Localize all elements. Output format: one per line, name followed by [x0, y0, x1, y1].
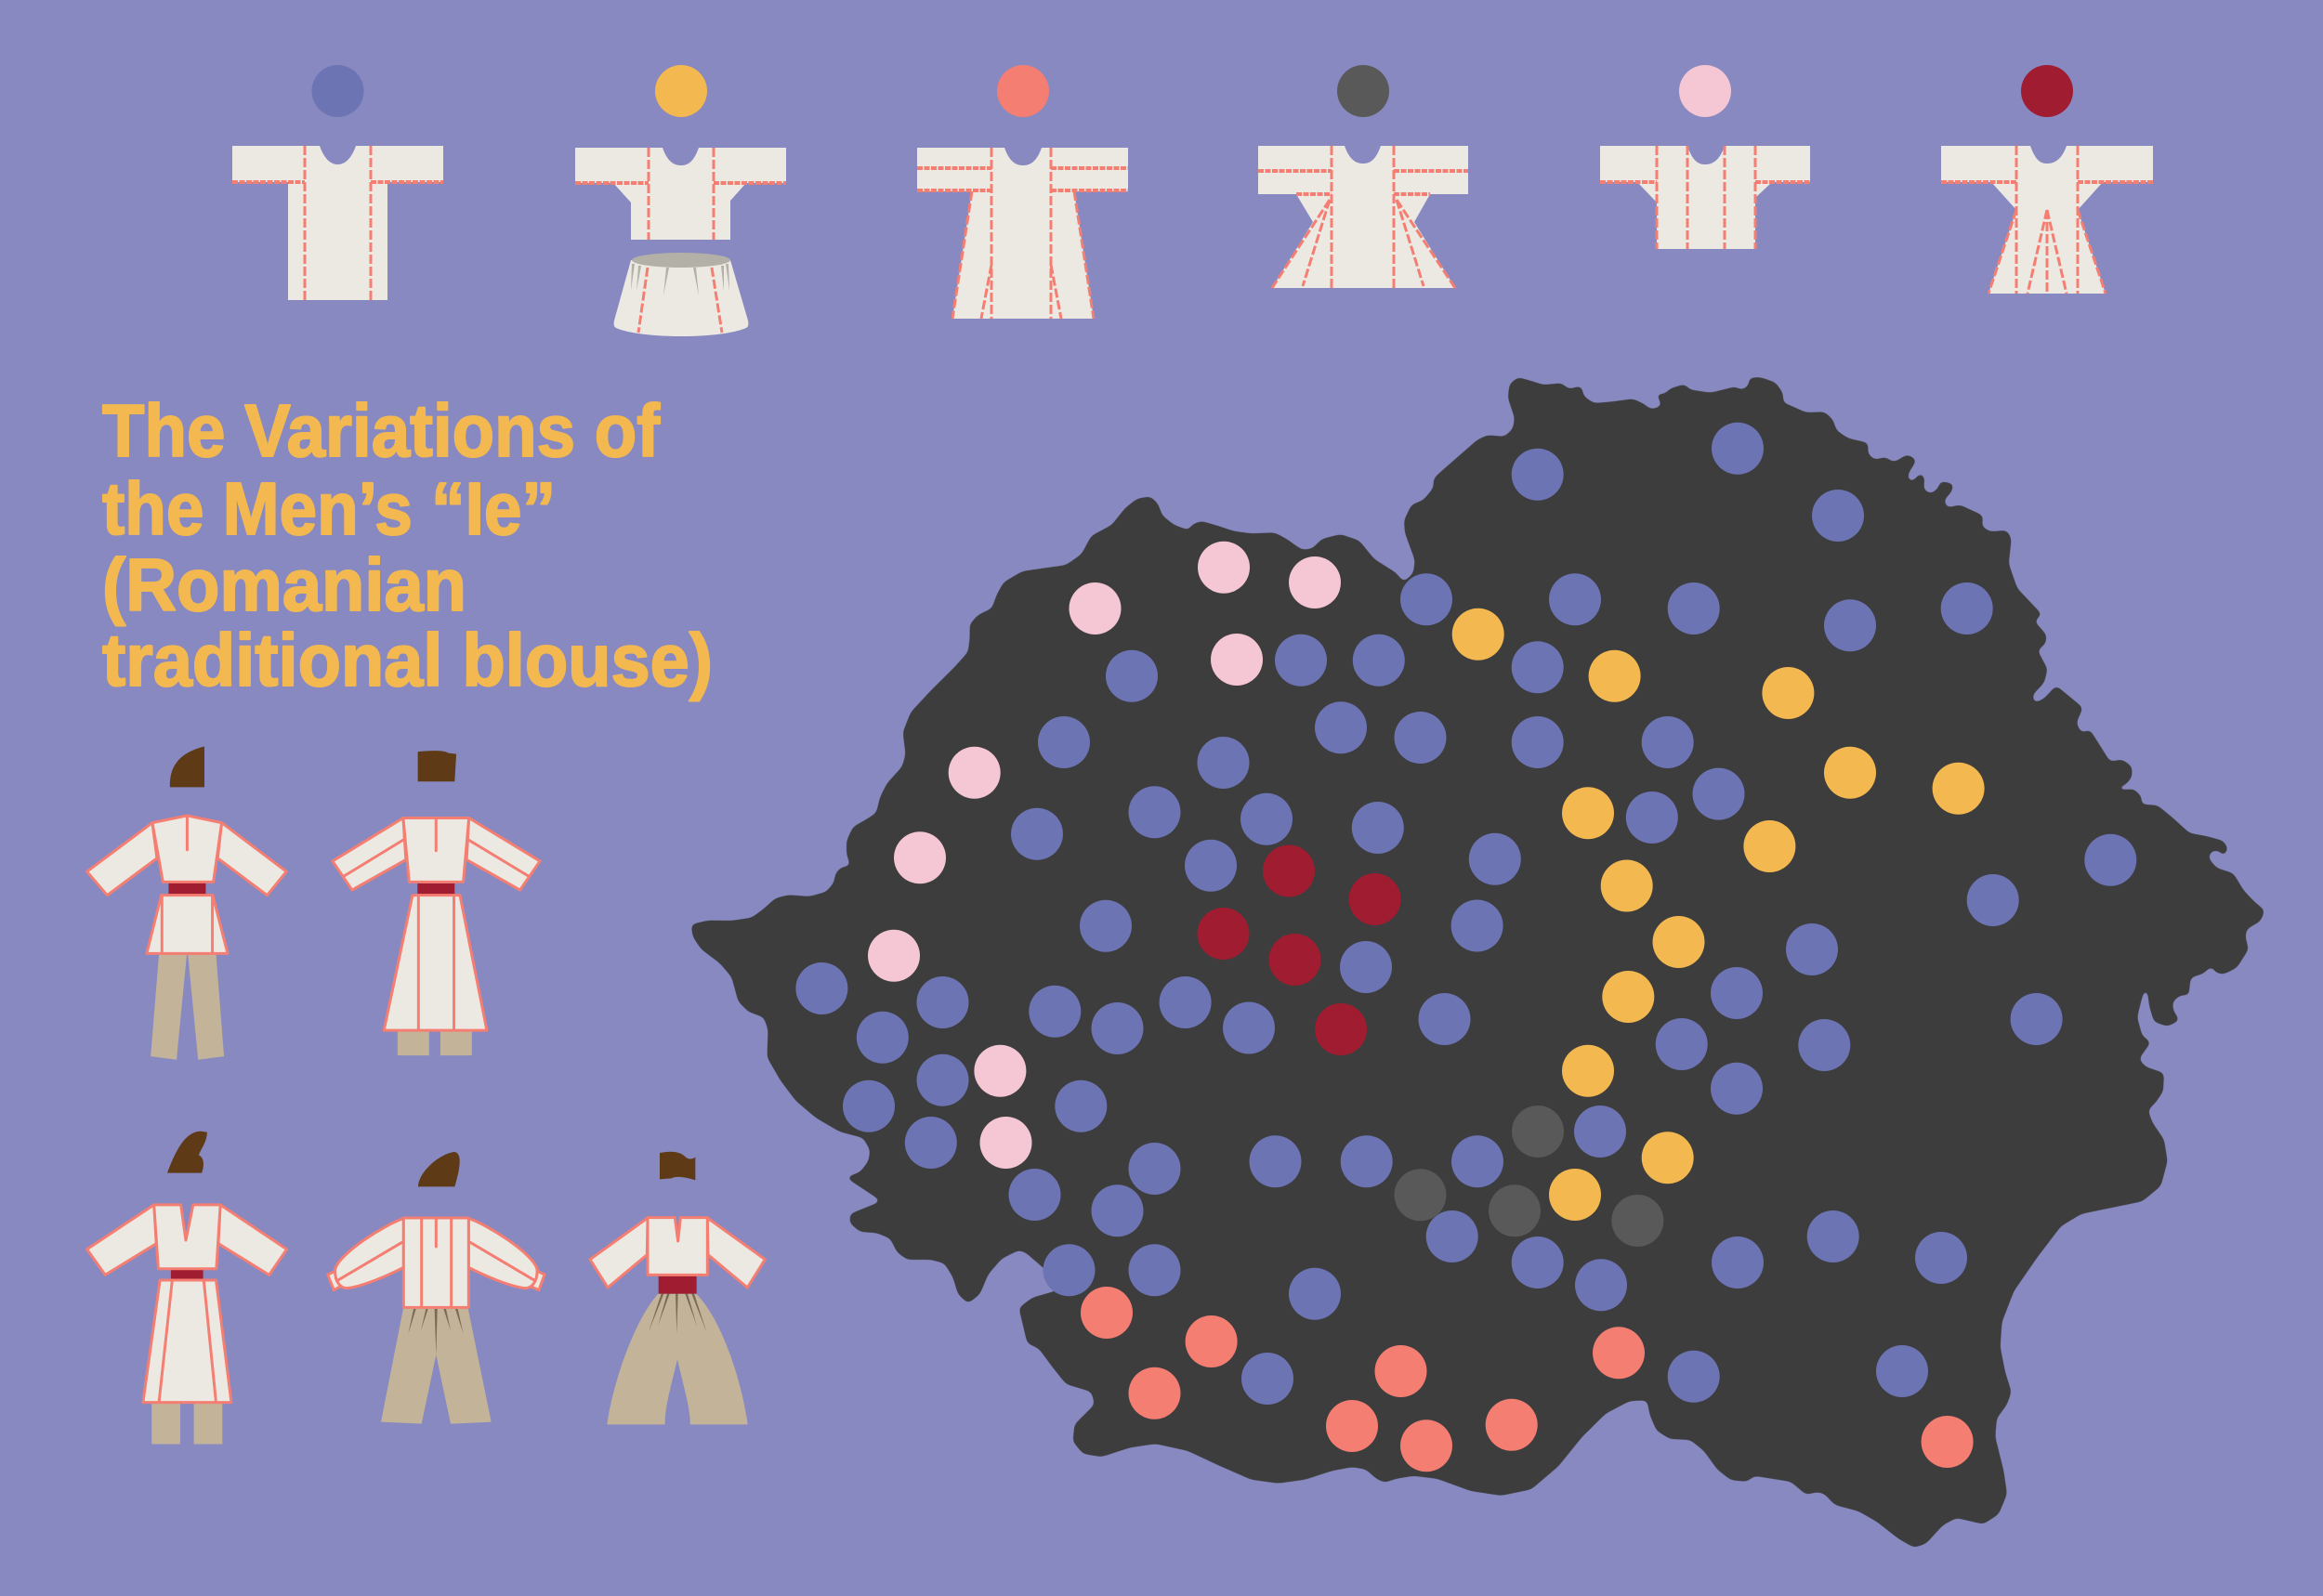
title: [102, 389, 713, 701]
legend: garment type 1, blue: [232, 65, 443, 300]
legend dot: dark red: [2021, 65, 2073, 117]
costume figures group, first three: [87, 746, 540, 1444]
figure 2: long straight costume: [333, 751, 540, 1055]
title: traditional blouse): [102, 619, 713, 701]
title: the Men’s “Ie”: [102, 467, 556, 550]
garment: short shirt with separate skirt: [575, 148, 786, 336]
garment: short shirt with four seams: [1600, 146, 1810, 249]
map dots: coral variation: [1081, 1287, 1974, 1472]
figure 4: puffed sleeve costume: [328, 1152, 545, 1424]
map silhouette: [691, 377, 2265, 1548]
figure 3: V-neck long costume: [87, 1132, 287, 1444]
legend: garment type 2, yellow: [575, 65, 786, 336]
map dots: dark red variation: [1197, 845, 1401, 1055]
garment: long shirt with side gores: [917, 148, 1128, 319]
garment: flared shirt with gussets: [1258, 146, 1468, 288]
map dots: grey variation: [1394, 1105, 1663, 1247]
legend: garment type 5, pink: [1600, 65, 1810, 249]
garment: flared shirt with centre gores: [1941, 146, 2153, 294]
map dots: pink variation: [868, 542, 1341, 1169]
garment: straight long shirt: [232, 146, 443, 300]
figure 5: wide trousers costume: [590, 1152, 765, 1424]
legend dot: pink: [1679, 65, 1731, 117]
map dots: yellow variation: [1452, 608, 1985, 1221]
figure 1: short-skirted costume: [87, 746, 286, 1060]
legend dot: coral: [997, 65, 1049, 117]
title: (Romanian: [102, 543, 466, 626]
legend dot: blue: [312, 65, 364, 117]
legend: garment type 4, grey: [1258, 65, 1468, 288]
legend: garment type 6, dark red: [1941, 65, 2153, 294]
title: The Variations of: [102, 389, 660, 472]
legend: garment type 3, coral: [917, 65, 1128, 319]
map of Romania: [691, 377, 2265, 1548]
costume figures group, last two: [328, 1152, 765, 1424]
legend dot: grey: [1337, 65, 1389, 117]
legend dot: yellow: [655, 65, 707, 117]
map dots: blue variation: [795, 423, 2136, 1405]
